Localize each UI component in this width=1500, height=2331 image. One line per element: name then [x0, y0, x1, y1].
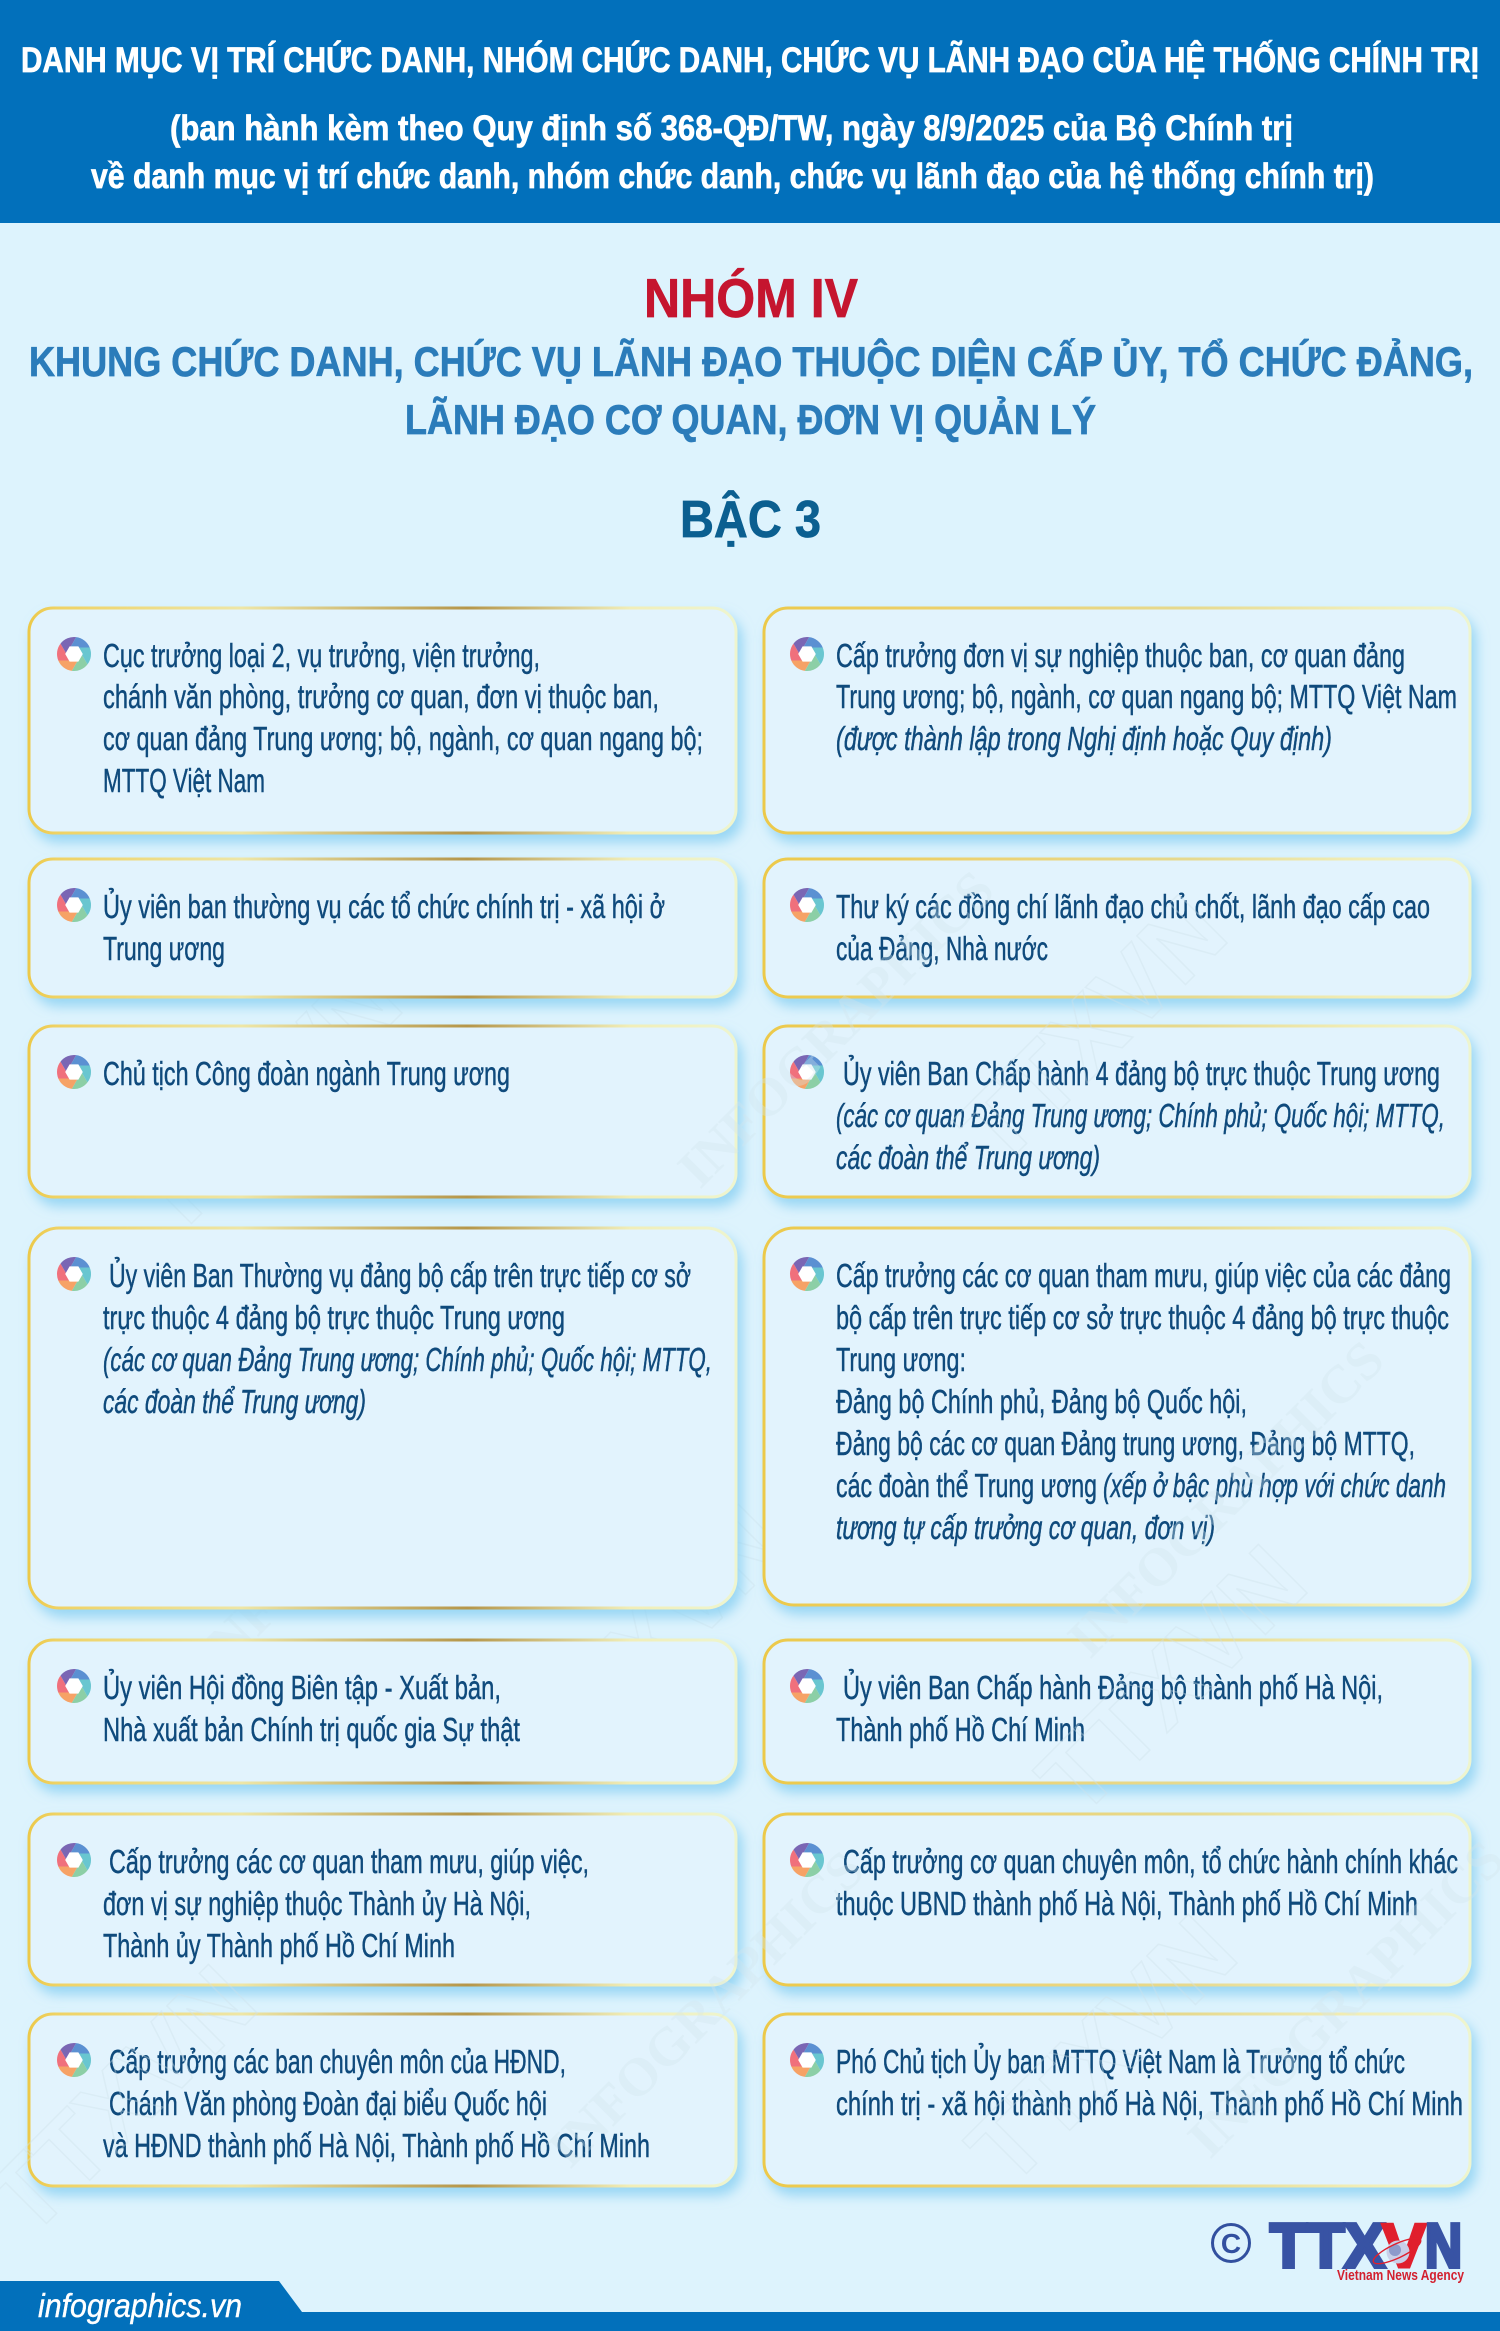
- text block: [836, 1669, 1383, 1748]
- text block: Ủy viên ban thường vụ các tổ chức chính trị - xã hội ở: [103, 888, 665, 925]
- icon: aperture: [57, 1843, 91, 1877]
- panel: row 1 left: [29, 608, 736, 833]
- text block: [836, 888, 1430, 967]
- text block: [836, 1843, 1458, 1922]
- text block: Ủy viên Ban Thường vụ đảng bộ cấp trên trực tiếp cơ sở: [109, 1257, 691, 1294]
- icon: aperture: [57, 1669, 91, 1703]
- footer band: [0, 2281, 1500, 2331]
- text block: Chủ tịch Công đoàn ngành Trung ương: [103, 1055, 510, 1092]
- text block: và HĐND thành phố Hà Nội, Thành phố Hồ Chí Minh: [103, 2127, 650, 2164]
- panel: row 6 right: [764, 1814, 1470, 1985]
- watermarks over panels: INFOGRAPHICS: [666, 859, 1005, 1198]
- text block: [836, 2043, 1463, 2122]
- icon: copyright: [1212, 2224, 1250, 2262]
- icon: aperture: [790, 637, 824, 671]
- panel: row 5 left: [29, 1640, 736, 1783]
- icon: aperture: [57, 888, 91, 922]
- text block: Thành phố Hồ Chí Minh: [836, 1711, 1085, 1748]
- text block: tương tự cấp trưởng cơ quan, đơn vị): [836, 1509, 1215, 1546]
- watermarks over panels: TTXVN: [946, 1895, 1257, 2206]
- watermarks over panels: TTXVN: [936, 875, 1247, 1186]
- panel: row 3 right: [764, 1026, 1470, 1197]
- watermarks: TTXVN: [111, 945, 422, 1256]
- icon: aperture: [57, 2043, 91, 2077]
- panel: row 6 left: [29, 1814, 736, 1985]
- text block: [103, 2043, 650, 2164]
- icon: aperture: [790, 2043, 824, 2077]
- text block: các đoàn thể Trung ương: [836, 1467, 1097, 1504]
- icon: aperture: [790, 1669, 824, 1703]
- text block: Thành ủy Thành phố Hồ Chí Minh: [103, 1927, 455, 1964]
- text block: Chánh Văn phòng Đoàn đại biểu Quốc hội: [109, 2085, 547, 2122]
- panel: row 7 right: [764, 2014, 1470, 2186]
- watermarks: TTXVN: [496, 1485, 807, 1796]
- text block: chánh văn phòng, trưởng cơ quan, đơn vị thuộc ban,: [103, 678, 659, 715]
- heading: group number: NHÓM IV: [644, 267, 858, 329]
- text block: [103, 1669, 520, 1748]
- panel: row 3 left: [29, 1026, 736, 1197]
- header subtitle: [91, 109, 1374, 196]
- logo: TTXVN: [1212, 2212, 1465, 2284]
- logo tagline: Vietnam News Agency: [1337, 2267, 1465, 2284]
- icon: aperture: [790, 1843, 824, 1877]
- heading: group description: [29, 336, 1473, 443]
- text block: Cục trưởng loại 2, vụ trưởng, viện trưởng,: [103, 637, 540, 674]
- text block: Cấp trưởng các cơ quan tham mưu, giúp việc,: [109, 1843, 589, 1880]
- panel: row 1 right: [764, 608, 1470, 833]
- text block: Trung ương: [103, 930, 225, 967]
- heading: level: BẬC 3: [680, 490, 821, 549]
- logo wordmark: N: [1425, 2212, 1462, 2281]
- icon: aperture: [790, 888, 824, 922]
- text block: Trung ương:: [836, 1341, 966, 1378]
- text block: các đoàn thể Trung ương): [103, 1383, 366, 1420]
- text block: của Đảng, Nhà nước: [836, 930, 1048, 967]
- panel: row 4 right: [764, 1228, 1470, 1605]
- icon: aperture: [57, 1257, 91, 1291]
- text block: (các cơ quan Đảng Trung ương; Chính phủ; Quốc hội; MTTQ,: [103, 1341, 712, 1378]
- watermarks: [111, 945, 807, 1796]
- watermarks: INFOGRAPHICS: [181, 1349, 520, 1688]
- icon: aperture: [790, 1055, 824, 1089]
- footer url: infographics.vn: [38, 2287, 242, 2324]
- panel: row 2 right: [764, 859, 1470, 997]
- text block: Ủy viên Hội đồng Biên tập - Xuất bản,: [103, 1669, 501, 1706]
- icon: copyright: C: [1221, 2228, 1241, 2259]
- header band: [0, 0, 1500, 223]
- header subtitle: (ban hành kèm theo Quy định số 368-QĐ/TW, ngày 8/9/2025 của Bộ Chính trị: [170, 109, 1293, 148]
- logo wordmark: TTX: [1270, 2212, 1385, 2281]
- text block: [103, 888, 665, 967]
- panel: row 2 left: [29, 859, 736, 997]
- watermarks over panels: [0, 859, 1500, 2256]
- text block: [836, 1055, 1445, 1176]
- panel: row 5 right: [764, 1640, 1470, 1783]
- text block: MTTQ Việt Nam: [103, 762, 265, 799]
- watermarks over panels: INFOGRAPHICS: [536, 1839, 875, 2178]
- text block: [103, 1257, 712, 1420]
- icon: aperture: [57, 637, 91, 671]
- text block: Cấp trưởng các ban chuyên môn của HĐND,: [109, 2043, 566, 2080]
- text block: các đoàn thể Trung ương): [836, 1139, 1100, 1176]
- text block: Đảng bộ Chính phủ, Đảng bộ Quốc hội,: [836, 1383, 1247, 1420]
- text block: Nhà xuất bản Chính trị quốc gia Sự thật: [103, 1711, 520, 1748]
- text block: đơn vị sự nghiệp thuộc Thành ủy Hà Nội,: [103, 1885, 531, 1922]
- icon: aperture: [790, 1257, 824, 1291]
- logo wordmark: V: [1382, 2212, 1426, 2281]
- text block: cơ quan đảng Trung ương; bộ, ngành, cơ quan ngang bộ;: [103, 720, 703, 757]
- text block: [103, 1843, 589, 1964]
- text block: [836, 637, 1457, 757]
- heading: group description: LÃNH ĐẠO CƠ QUAN, ĐƠN VỊ QUẢN LÝ: [405, 395, 1096, 443]
- icon: aperture: [57, 1055, 91, 1089]
- text block: [836, 1257, 1451, 1546]
- watermarks over panels: INFOGRAPHICS: [1056, 1329, 1395, 1668]
- text block: [103, 637, 703, 799]
- watermarks over panels: TTXVN: [1016, 1525, 1327, 1836]
- text block: trực thuộc 4 đảng bộ trực thuộc Trung ương: [103, 1299, 565, 1336]
- panel: row 7 left: [29, 2014, 736, 2186]
- logo wordmark: [1270, 2212, 1462, 2281]
- panel: row 4 left: [29, 1228, 736, 1608]
